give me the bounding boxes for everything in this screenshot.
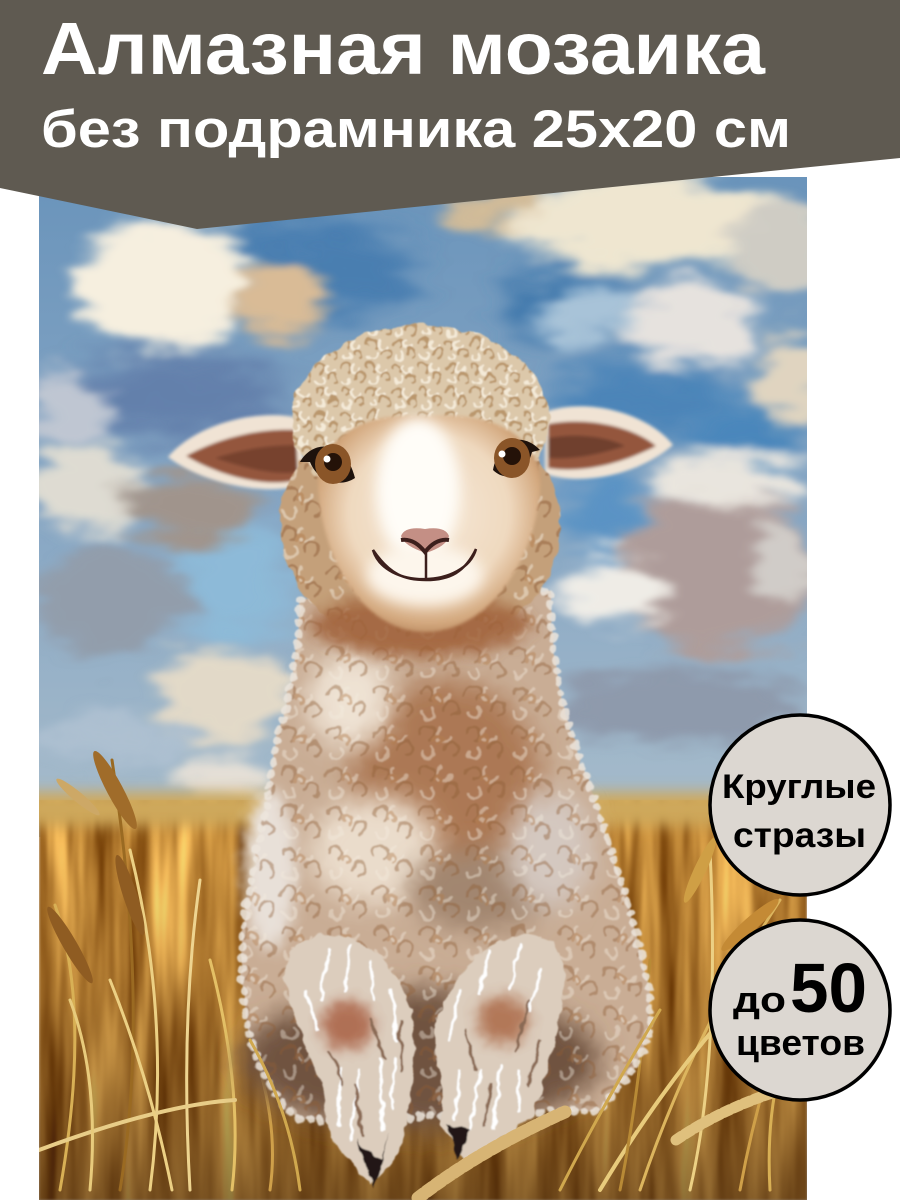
badge: up to 50 colours: до — [733, 979, 786, 1020]
lamb face — [318, 415, 540, 632]
lamb head wool — [280, 325, 560, 657]
clouds — [26, 178, 830, 804]
badge: round rhinestones: Круглые — [722, 768, 876, 806]
lamb front legs — [285, 934, 565, 1188]
sky — [39, 177, 807, 837]
header banner — [0, 0, 900, 229]
painting: lamb in a wheat field — [20, 177, 830, 1200]
badge: round rhinestones — [710, 715, 890, 895]
badge: up to 50 colours: цветов — [736, 1022, 865, 1063]
foreground wheat — [250, 1010, 775, 1198]
lamb — [168, 325, 775, 1198]
lamb eyes — [300, 438, 540, 484]
badge: up to 50 colours — [710, 920, 890, 1100]
badge: round rhinestones: стразы — [733, 816, 866, 855]
lamb nose and smile — [373, 528, 476, 580]
lamb ears — [168, 406, 673, 489]
wheat ears — [42, 747, 783, 987]
wheat field — [20, 747, 830, 1200]
lamb body — [240, 590, 651, 1130]
badge: up to 50 colours: 50 — [790, 949, 867, 1027]
subtitle: без подрамника 25х20 см — [41, 100, 791, 159]
title: Алмазная мозаика — [41, 7, 766, 90]
